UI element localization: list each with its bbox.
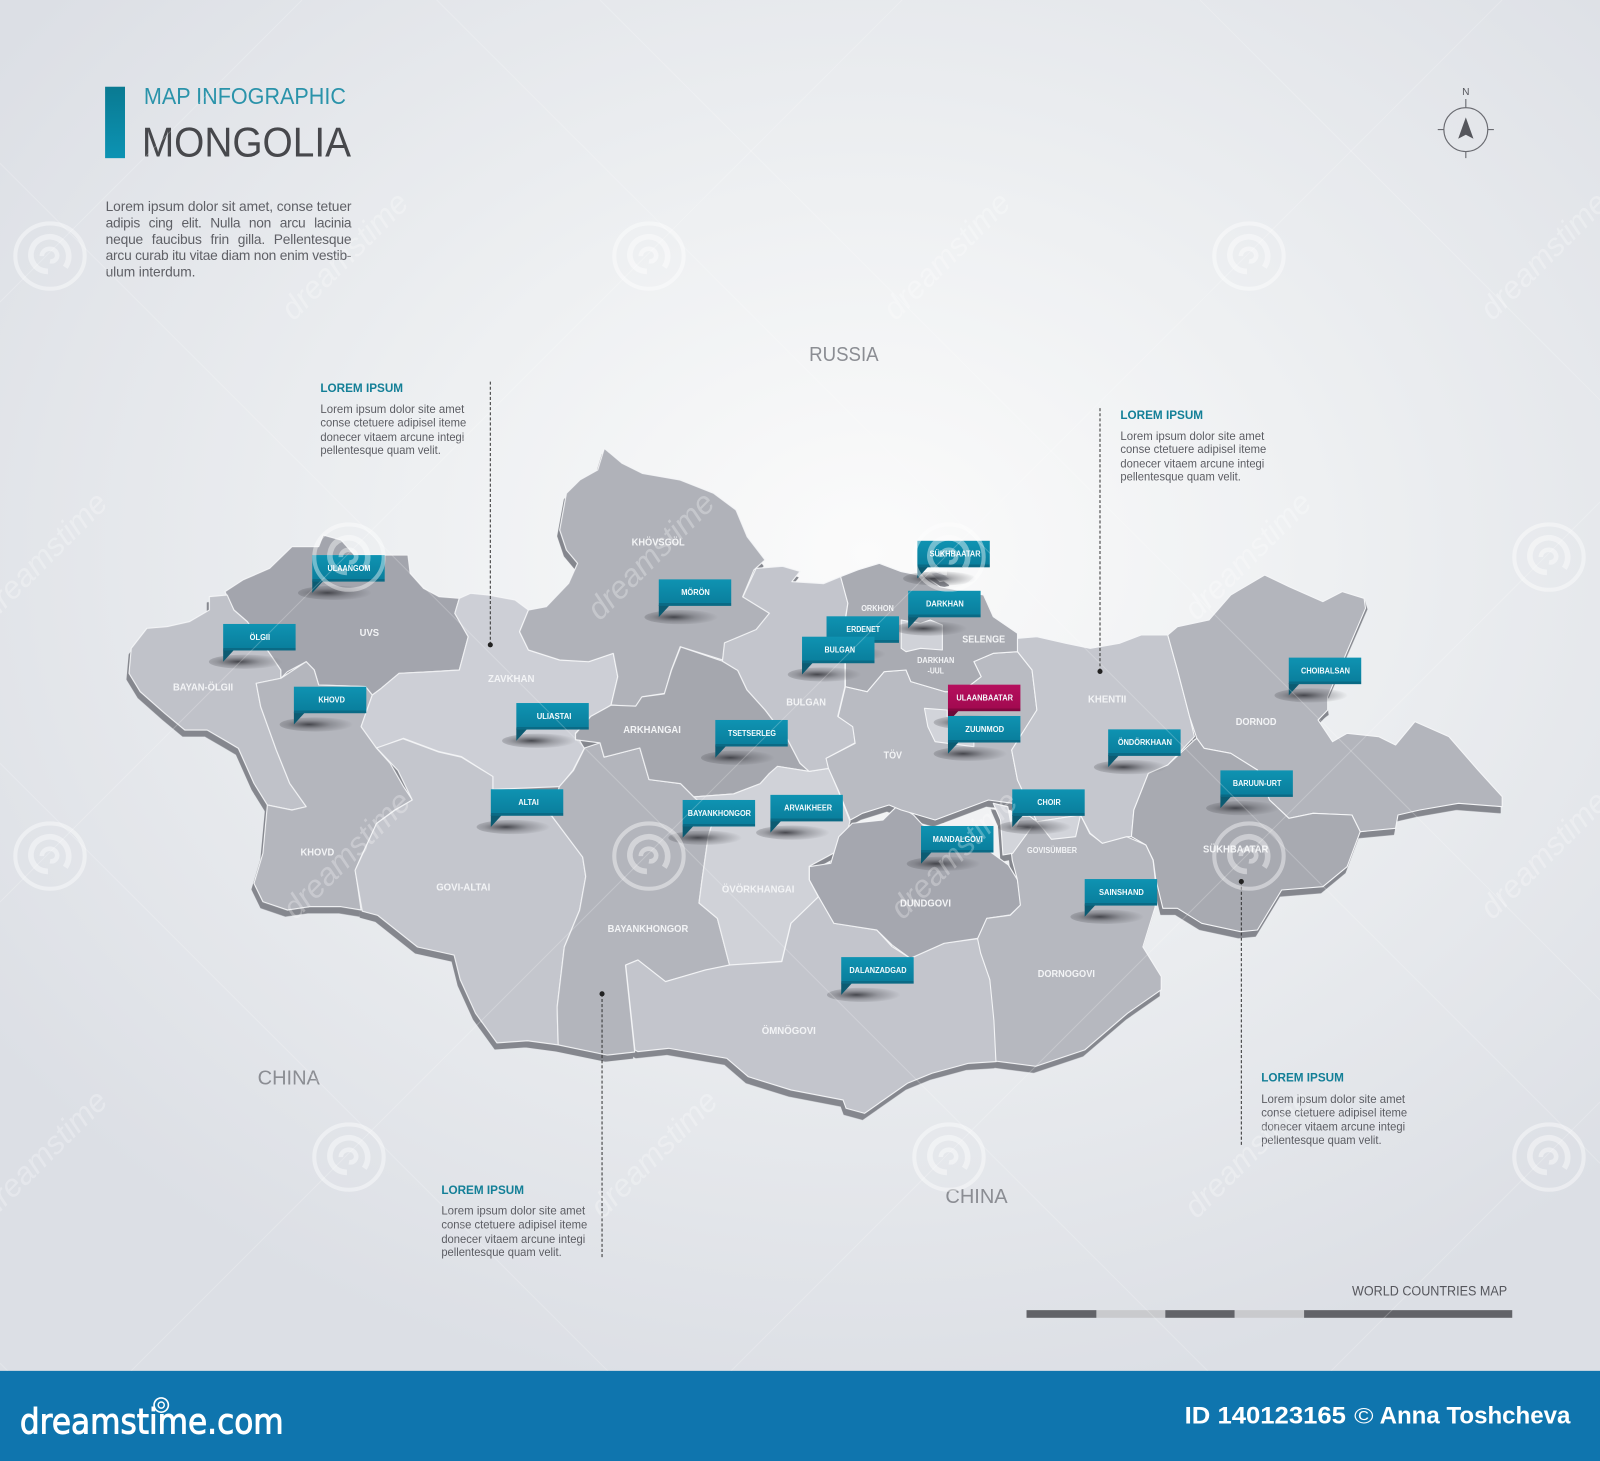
- pin: Ulaanbaatar capital: ULAANBAATAR: [956, 693, 1013, 702]
- pin: Altai: [477, 789, 563, 834]
- callout: south-east: [1239, 879, 1407, 1147]
- pin: Ondorkhaan: [1094, 729, 1181, 774]
- pin: Sukhbaatar city: SÜKHBAATAR: [930, 549, 981, 559]
- region: Govi-Altai: [355, 739, 586, 1045]
- province labels: ARKHANGAI: [623, 725, 681, 736]
- province labels: GOVISÜMBER: [1027, 845, 1078, 855]
- callout: north-west: LOREM IPSUM: [320, 381, 403, 395]
- province labels: GOVI-ALTAI: [436, 882, 490, 893]
- region: Tov: [826, 652, 1037, 822]
- callout: north-west: conse ctetuere adipisel iteme: [320, 416, 466, 430]
- pin: Tsetserleg: TSETSERLEG: [728, 729, 776, 738]
- icon: footer spiral: [154, 1398, 168, 1412]
- region: Govisumber east: [1037, 815, 1081, 839]
- intro paragraph: ulum interdum.: [106, 265, 195, 280]
- region: Dornogovi: [978, 815, 1161, 1066]
- pin: Olgii: [209, 624, 296, 669]
- callout: north-east: donecer vitaem arcune integi: [1120, 456, 1264, 470]
- pin: Ulaanbaatar capital: [934, 685, 1020, 730]
- callout: north-west: [320, 381, 493, 647]
- pin: Mandalgovi: [907, 826, 993, 871]
- pin: Ulaangom: ULAANGOM: [328, 564, 371, 573]
- region: Dornod: [1168, 575, 1502, 832]
- map of provinces: [129, 448, 1502, 1113]
- map side slivers: [560, 530, 1367, 722]
- pin: Bulgan: [788, 637, 874, 682]
- map extrusion side: [127, 454, 1500, 1119]
- intro paragraph: Lorem ipsum dolor sit amet, conse tetuer: [106, 199, 352, 214]
- pin: Uliastai: ULIASTAI: [537, 712, 571, 721]
- pin: Darkhan: [894, 591, 981, 636]
- image id number: ID 140123165: [1185, 1402, 1346, 1429]
- province labels: DUNDGOVI: [900, 899, 951, 910]
- province labels: [173, 535, 1277, 1037]
- pin: Choir: CHOIR: [1037, 798, 1061, 807]
- region: Khovd: [254, 662, 412, 910]
- province labels: ÖVÖRKHANGAI: [722, 882, 795, 895]
- province labels: KHENTII: [1088, 695, 1126, 706]
- pin: Khovd: KHOVD: [318, 696, 345, 705]
- country label: Russia: RUSSIA: [809, 344, 879, 366]
- province labels: ORKHON: [861, 603, 894, 613]
- pin: Arvaikheer: [756, 795, 843, 840]
- callout: south: Lorem ipsum dolor site amet: [441, 1204, 586, 1218]
- province labels: SÜKHBAATAR: [1203, 843, 1269, 856]
- province labels: DORNOGOVI: [1038, 969, 1095, 980]
- province labels: SELENGE: [962, 634, 1005, 645]
- callout: south-east: conse ctetuere adipisel iteme: [1261, 1105, 1407, 1119]
- province labels: UVS: [360, 628, 379, 639]
- pin: Bayankhongor: [668, 800, 755, 845]
- province labels: BULGAN: [786, 698, 826, 709]
- callout: north-east: [1097, 408, 1266, 674]
- pin: Choibalsan: CHOIBALSAN: [1301, 666, 1350, 675]
- pin: Darkhan: DARKHAN: [926, 600, 964, 609]
- intro paragraph: adipis cing elit. Nulla non arcu lacinia: [106, 216, 352, 231]
- copyright sign: ©: [1354, 1403, 1374, 1428]
- region: Arkhangai: [576, 647, 809, 797]
- footer band: [0, 1371, 1600, 1461]
- intro paragraph: [106, 199, 352, 280]
- callout: south: donecer vitaem arcune integi: [441, 1232, 585, 1246]
- province labels: -UUL: [928, 665, 944, 675]
- province labels: TÖV: [884, 749, 902, 762]
- province labels: KHÖVSGÖL: [632, 535, 685, 548]
- province labels: DORNOD: [1236, 717, 1277, 728]
- callout: north-east: LOREM IPSUM: [1120, 408, 1203, 422]
- pin: Choibalsan: [1274, 658, 1361, 703]
- pin: Zuunmod: [934, 716, 1020, 761]
- region: Ulaanbaatar: [924, 708, 974, 747]
- callout: north-west: pellentesque quam velit.: [320, 443, 441, 457]
- region: Ovorkhangai: [694, 766, 850, 965]
- callout: north-east: pellentesque quam velit.: [1120, 470, 1241, 484]
- title: MONGOLIA: [142, 119, 351, 166]
- province labels: BAYANKHONGOR: [608, 924, 689, 935]
- pin: Erdenet: [812, 616, 899, 661]
- watermark overlay: dreamstime: [579, 484, 722, 627]
- scale bar: [1027, 1283, 1512, 1318]
- callout: south-east: LOREM IPSUM: [1261, 1071, 1344, 1085]
- title block: [105, 83, 351, 166]
- pin: Baruun-Urt: [1206, 770, 1293, 815]
- pin: Bulgan: BULGAN: [824, 646, 855, 655]
- province labels: ZAVKHAN: [488, 674, 534, 685]
- pin: Mandalgovi: MANDALGOVI: [933, 835, 983, 844]
- province labels: KHOVD: [301, 848, 334, 859]
- region: Govisumber west: [993, 803, 1032, 855]
- intro paragraph: arcu curab itu vitae diam non enim vestib-: [106, 248, 352, 263]
- callout: south: LOREM IPSUM: [441, 1183, 524, 1197]
- region: Darkhan-Uul: [901, 620, 942, 652]
- subtitle: MAP INFOGRAPHIC: [144, 83, 346, 109]
- watermark overlay: dreamstime: [882, 783, 1025, 926]
- region: Dundgovi: [809, 805, 1021, 958]
- region: Uvs: [225, 535, 468, 695]
- watermark overlay: dreamstime: [1176, 484, 1318, 627]
- pin: Choir: [998, 789, 1085, 834]
- pin: Sukhbaatar city: [903, 541, 990, 586]
- country label: China south: CHINA: [945, 1186, 1008, 1208]
- pin: Ondorkhaan: ÖNDÖRKHAAN: [1118, 737, 1172, 747]
- country label: China west: CHINA: [258, 1068, 320, 1090]
- pin: Ulaangom: [298, 555, 385, 600]
- icon: compass: N: [1462, 87, 1469, 98]
- callout: south-east: Lorem ipsum dolor site amet: [1261, 1092, 1406, 1106]
- callout: north-west: donecer vitaem arcune integi: [320, 430, 464, 444]
- pin: Moron: [644, 579, 731, 624]
- pin: Erdenet: ERDENET: [846, 625, 880, 634]
- callout: south: [441, 991, 605, 1259]
- footer logo text: dreamstime.com: [20, 1403, 284, 1443]
- pin: Sainshand: [1070, 879, 1157, 924]
- city pins: [209, 541, 1361, 1002]
- pin: Bayankhongor: BAYANKHONGOR: [688, 809, 751, 818]
- author credit: Anna Toshcheva: [1380, 1402, 1571, 1429]
- province labels: BAYAN-ÖLGII: [173, 680, 233, 693]
- pin: Tsetserleg: [701, 720, 788, 765]
- callout: south: conse ctetuere adipisel iteme: [441, 1218, 587, 1232]
- province labels: ÖMNÖGOVI: [762, 1024, 816, 1037]
- pin: Khovd: [280, 687, 366, 732]
- pin: Olgii: ÖLGII: [250, 632, 270, 642]
- pin: Uliastai: [502, 703, 589, 748]
- region: Sukhbaatar: [1131, 738, 1360, 932]
- watermark overlay: dreamstime: [275, 783, 417, 926]
- pin: Dalanzadgad: DALANZADGAD: [849, 966, 907, 975]
- intro paragraph: neque faucibus frin gilla. Pellentesque: [106, 232, 352, 247]
- callout: south-east: pellentesque quam velit.: [1261, 1133, 1382, 1147]
- region: Zavkhan: [361, 593, 618, 789]
- region: Omnogovi: [626, 897, 996, 1113]
- province labels: DARKHAN: [917, 655, 954, 665]
- pin: Sainshand: SAINSHAND: [1099, 888, 1144, 897]
- pin: Moron: MÖRÖN: [681, 587, 710, 597]
- scale bar: WORLD COUNTRIES MAP: [1352, 1283, 1507, 1299]
- callout: south-east: donecer vitaem arcune integi: [1261, 1120, 1405, 1134]
- watermark overlay: dreamstime: [1176, 1082, 1318, 1225]
- title accent bar: [105, 87, 125, 158]
- watermark overlay: dreamstime: [875, 184, 1017, 327]
- callout: north-west: Lorem ipsum dolor site amet: [320, 402, 465, 416]
- region: Selenge: [841, 563, 1018, 692]
- watermark overlay: dreamstime: [582, 1082, 725, 1225]
- region: Bayankhongor: [552, 743, 730, 1055]
- icon: compass: [1438, 87, 1494, 158]
- pin: Baruun-Urt: BARUUN-URT: [1233, 779, 1281, 788]
- pin: Zuunmod: ZUUNMOD: [965, 725, 1004, 734]
- callout: north-east: conse ctetuere adipisel iteme: [1120, 442, 1266, 456]
- region: Khovsgol: [520, 448, 769, 707]
- pin: Arvaikheer: ARVAIKHEER: [784, 804, 832, 813]
- region: Bayan-Olgii: [129, 595, 306, 810]
- region: small enclave: [930, 572, 951, 582]
- region: Bulgan: [722, 566, 855, 771]
- region: Khentii: [1012, 635, 1194, 843]
- watermark overlay: dreamstime: [273, 184, 415, 327]
- pin: Altai: ALTAI: [518, 798, 539, 807]
- callout: south: pellentesque quam velit.: [441, 1245, 562, 1259]
- callout: north-east: Lorem ipsum dolor site amet: [1120, 429, 1265, 443]
- pin: Dalanzadgad: [827, 957, 914, 1002]
